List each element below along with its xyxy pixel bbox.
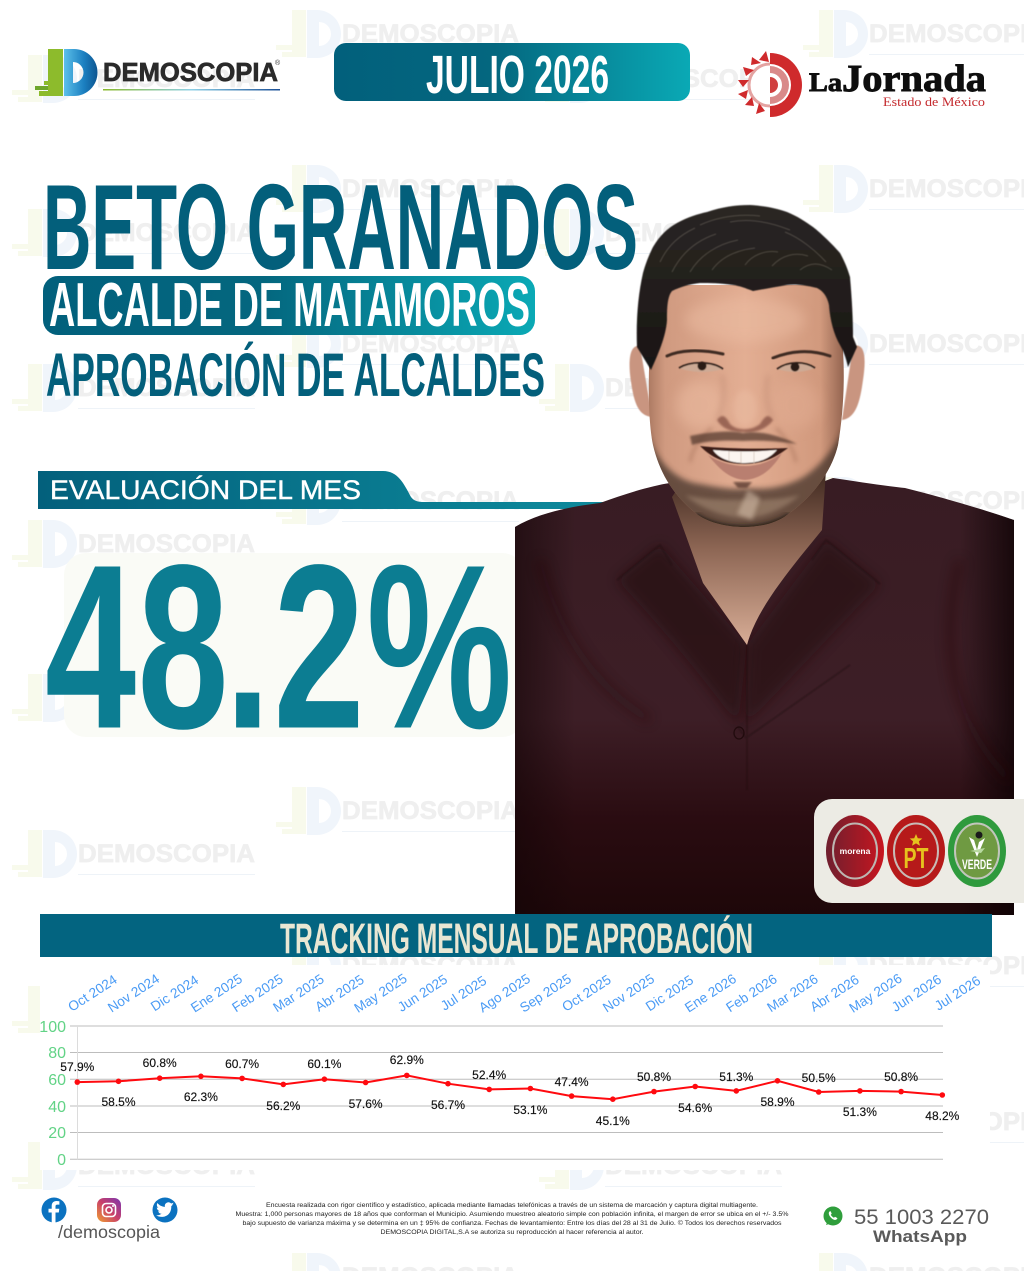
text: DEMOSCOPIA <box>342 487 519 515</box>
text: DEMOSCOPIA <box>342 797 519 825</box>
data labels <box>60 1053 960 1128</box>
photo: smiling man in maroon shirt <box>515 205 1014 915</box>
x axis labels: Nov 2025 <box>600 971 657 1015</box>
y axis labels: 20 <box>48 1125 66 1142</box>
logo: La Jornada Estado de México: Jornada <box>842 58 986 100</box>
x axis labels: Jun 2025 <box>395 972 450 1015</box>
icon: Twitter <box>152 1198 178 1222</box>
badge: Verde: VERDE <box>962 856 992 872</box>
text: DEMOSCOPIA <box>78 530 255 558</box>
text: DEMOSCOPIA <box>342 952 519 980</box>
data labels: 45.1% <box>596 1114 630 1128</box>
x axis labels: Abr 2025 <box>312 972 367 1015</box>
x axis labels: Mar 2026 <box>764 971 821 1015</box>
text: DEMOSCOPIA <box>78 65 255 93</box>
WhatsApp label: WhatsApp <box>873 1227 967 1246</box>
x axis labels: Mar 2025 <box>270 971 327 1015</box>
x axis labels: Oct 2024 <box>65 972 120 1015</box>
x axis labels <box>65 971 983 1016</box>
y axis labels: 80 <box>48 1045 66 1062</box>
mouth <box>700 446 788 480</box>
x axis labels: Oct 2025 <box>559 972 614 1015</box>
icon: WhatsApp <box>824 1206 842 1226</box>
data labels: 62.3% <box>184 1090 218 1104</box>
x axis labels: Jul 2025 <box>438 973 489 1014</box>
panel: white chart backing <box>40 965 990 1170</box>
logo: La Jornada Estado de México <box>738 51 986 117</box>
badge: PT <box>887 815 945 887</box>
text: DEMOSCOPIA <box>342 20 519 48</box>
mustache <box>690 432 797 445</box>
text: DEMOSCOPIA <box>605 219 782 247</box>
text: DEMOSCOPIA <box>605 1152 782 1180</box>
data labels: 48.2% <box>925 1109 960 1123</box>
icon: Instagram <box>97 1198 121 1222</box>
methodology note <box>236 1202 789 1236</box>
text: DEMOSCOPIA <box>342 330 519 358</box>
banner: Evaluación del mes: EVALUACIÓN DEL MES <box>50 474 361 505</box>
text: DEMOSCOPIA <box>605 65 782 93</box>
hair <box>637 205 857 370</box>
nose <box>716 392 774 433</box>
beard <box>651 430 840 527</box>
data labels: 60.8% <box>143 1056 177 1070</box>
handle: /demoscopia: /demoscopia <box>58 1222 160 1242</box>
data labels: 56.2% <box>266 1099 301 1113</box>
subtitle pill: Alcalde de Matamoros <box>43 271 535 340</box>
eyes <box>679 362 815 372</box>
methodology note: Muestra: 1,000 personas mayores de 18 años que conforman el Municipio. Asumiendo muestreo aleatorio simple con población infinita, el margen de error se ubica en el +/- 3.5% <box>236 1211 789 1218</box>
icon: Facebook <box>42 1198 66 1222</box>
badge: Verde <box>948 815 1006 887</box>
logo: Demoscopia <box>35 49 281 96</box>
face <box>648 285 844 527</box>
text: DEMOSCOPIA <box>78 219 255 247</box>
x axis labels: Nov 2024 <box>105 971 162 1015</box>
data labels: 60.1% <box>307 1057 342 1071</box>
y axis labels: 100 <box>39 1019 66 1036</box>
badge: Morena: morena <box>840 846 871 856</box>
y axis labels: 60 <box>48 1072 66 1089</box>
y axis labels <box>39 1019 66 1169</box>
data line <box>77 1075 942 1099</box>
methodology note: DEMOSCOPIA DIGITAL,S.A se autoriza su reproducción al hacer referencia al autor. <box>380 1229 644 1236</box>
data labels: 58.5% <box>101 1095 136 1109</box>
button <box>734 727 744 739</box>
x axis labels: Feb 2025 <box>229 971 286 1015</box>
data labels: 50.8% <box>637 1070 671 1084</box>
text: DEMOSCOPIA <box>78 684 255 712</box>
text: DEMOSCOPIA <box>605 374 782 402</box>
shirt <box>515 478 1014 915</box>
x axis labels: Feb 2026 <box>723 971 780 1015</box>
data labels: 51.3% <box>719 1070 754 1084</box>
panel: party logos <box>814 799 1024 903</box>
text: DEMOSCOPIA <box>78 840 255 868</box>
logo: Demoscopia: ® <box>275 59 281 67</box>
data labels: 52.4% <box>472 1068 507 1082</box>
banner: Evaluación del mes <box>38 471 605 509</box>
heading: Aprobación de alcaldes: APROBACIÓN DE ALCALDES <box>46 341 545 409</box>
data labels: 57.6% <box>349 1097 383 1111</box>
neck <box>672 470 826 645</box>
x axis labels: May 2025 <box>351 971 410 1016</box>
methodology note: bajo supuesto de varianza máxima y se determina en un ‡ 95% de confianza. Fechas de levantamiento: Entre los días del 28 al 31 de Julio. © Todos los derechos reservados <box>242 1219 782 1227</box>
date pill: Julio 2026 <box>334 43 690 105</box>
text: DEMOSCOPIA <box>342 175 519 203</box>
logo: La Jornada Estado de México: La <box>809 68 842 97</box>
x axis labels: Sep 2025 <box>517 971 574 1015</box>
subtitle pill: Alcalde de Matamoros: ALCALDE DE MATAMOROS <box>49 271 530 340</box>
panel: pale backing for percentage <box>64 553 524 737</box>
text: DEMOSCOPIA <box>78 996 255 1024</box>
x axis labels: Jun 2026 <box>889 972 944 1015</box>
x axis labels: Ene 2026 <box>682 971 739 1015</box>
y axis labels: 40 <box>48 1099 66 1116</box>
data labels: 50.5% <box>802 1071 836 1085</box>
collar edges <box>617 540 880 760</box>
date pill: Julio 2026: JULIO 2026 <box>426 45 609 105</box>
data labels: 60.7% <box>225 1057 259 1071</box>
data labels: 62.9% <box>390 1053 424 1067</box>
ears <box>630 346 652 417</box>
logo: Demoscopia: DEMOSCOPIA <box>103 59 278 87</box>
x axis labels: Ene 2025 <box>188 971 245 1015</box>
data labels: 50.8% <box>884 1070 918 1084</box>
badge: Morena <box>826 815 884 887</box>
data labels: 56.7% <box>431 1098 465 1112</box>
x axis labels: May 2026 <box>846 971 905 1016</box>
data markers <box>74 1073 945 1102</box>
x axis labels: Abr 2026 <box>807 972 862 1015</box>
phone number: 55 1003 2270 <box>854 1205 989 1229</box>
text: DEMOSCOPIA <box>78 374 255 402</box>
logo: La Jornada Estado de México: Estado de México <box>883 94 985 109</box>
x axis labels: Ago 2025 <box>476 971 533 1015</box>
x axis labels: Dic 2024 <box>148 972 201 1014</box>
data labels: 58.9% <box>760 1095 795 1109</box>
data labels: 51.3% <box>843 1105 877 1119</box>
x axis labels: Dic 2025 <box>643 972 696 1014</box>
big number: 48.2%: 48.2% <box>45 515 512 777</box>
x axis labels: Jul 2026 <box>932 973 983 1014</box>
text: DEMOSCOPIA <box>342 642 519 670</box>
data labels: 54.6% <box>678 1101 713 1115</box>
eyebrows <box>667 351 830 358</box>
methodology note: Encuesta realizada con rigor científico y estadístico, aplicada mediante llamadas telefónicas a través de un sistema de marcación y captura digital multiagente. <box>266 1202 758 1209</box>
text: DEMOSCOPIA <box>78 1152 255 1180</box>
y axis labels: 0 <box>57 1152 66 1169</box>
data labels: 47.4% <box>555 1075 589 1089</box>
data labels: 53.1% <box>513 1103 548 1117</box>
data labels: 57.9% <box>60 1060 95 1074</box>
badge: PT: PT <box>904 843 929 875</box>
hair highlights <box>660 215 832 272</box>
line chart: monthly approval <box>39 971 983 1169</box>
